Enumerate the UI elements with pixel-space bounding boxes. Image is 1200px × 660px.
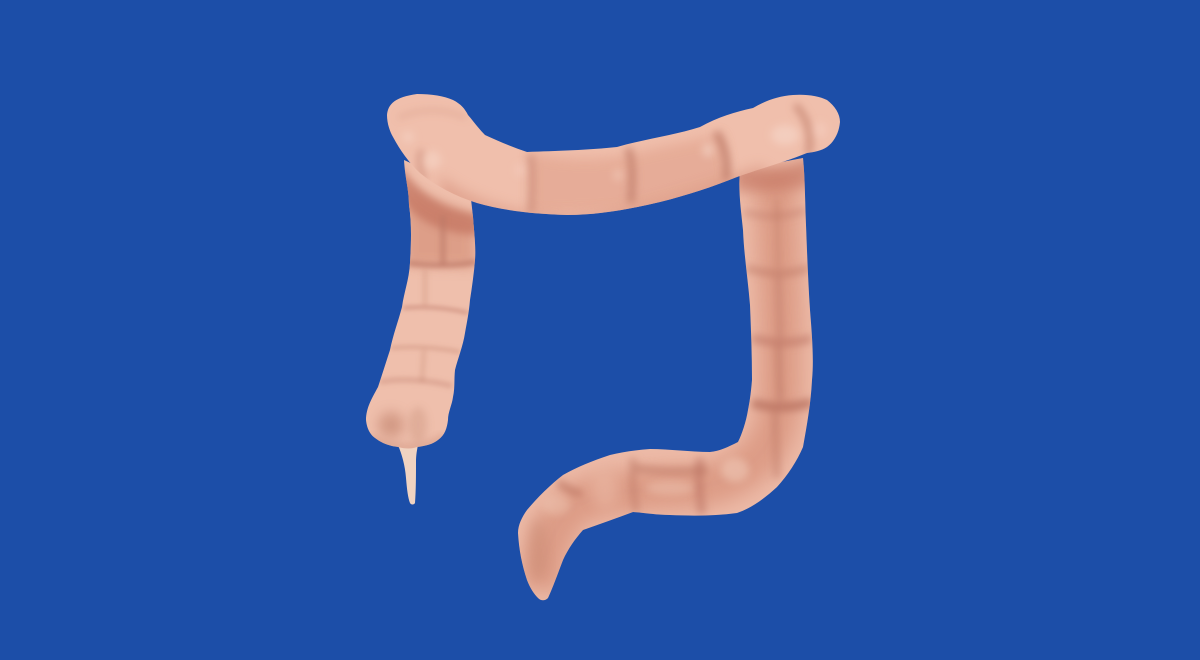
descending colon (right and lower) xyxy=(518,158,813,600)
transverse colon (top) xyxy=(387,94,840,215)
upper shaded part xyxy=(405,190,476,268)
specular highlights xyxy=(402,122,827,181)
central shaded band xyxy=(540,170,781,590)
cecum shading xyxy=(378,412,404,438)
underside shading xyxy=(530,135,730,215)
highlights xyxy=(646,481,694,495)
rectal tip shading xyxy=(528,521,544,574)
haustra folds xyxy=(398,105,810,213)
appendix tip xyxy=(398,445,418,504)
haustra folds xyxy=(380,215,476,386)
haustra folds xyxy=(558,200,812,514)
ascending colon (left) xyxy=(366,160,476,448)
illustration: colon on blue background xyxy=(366,94,840,600)
